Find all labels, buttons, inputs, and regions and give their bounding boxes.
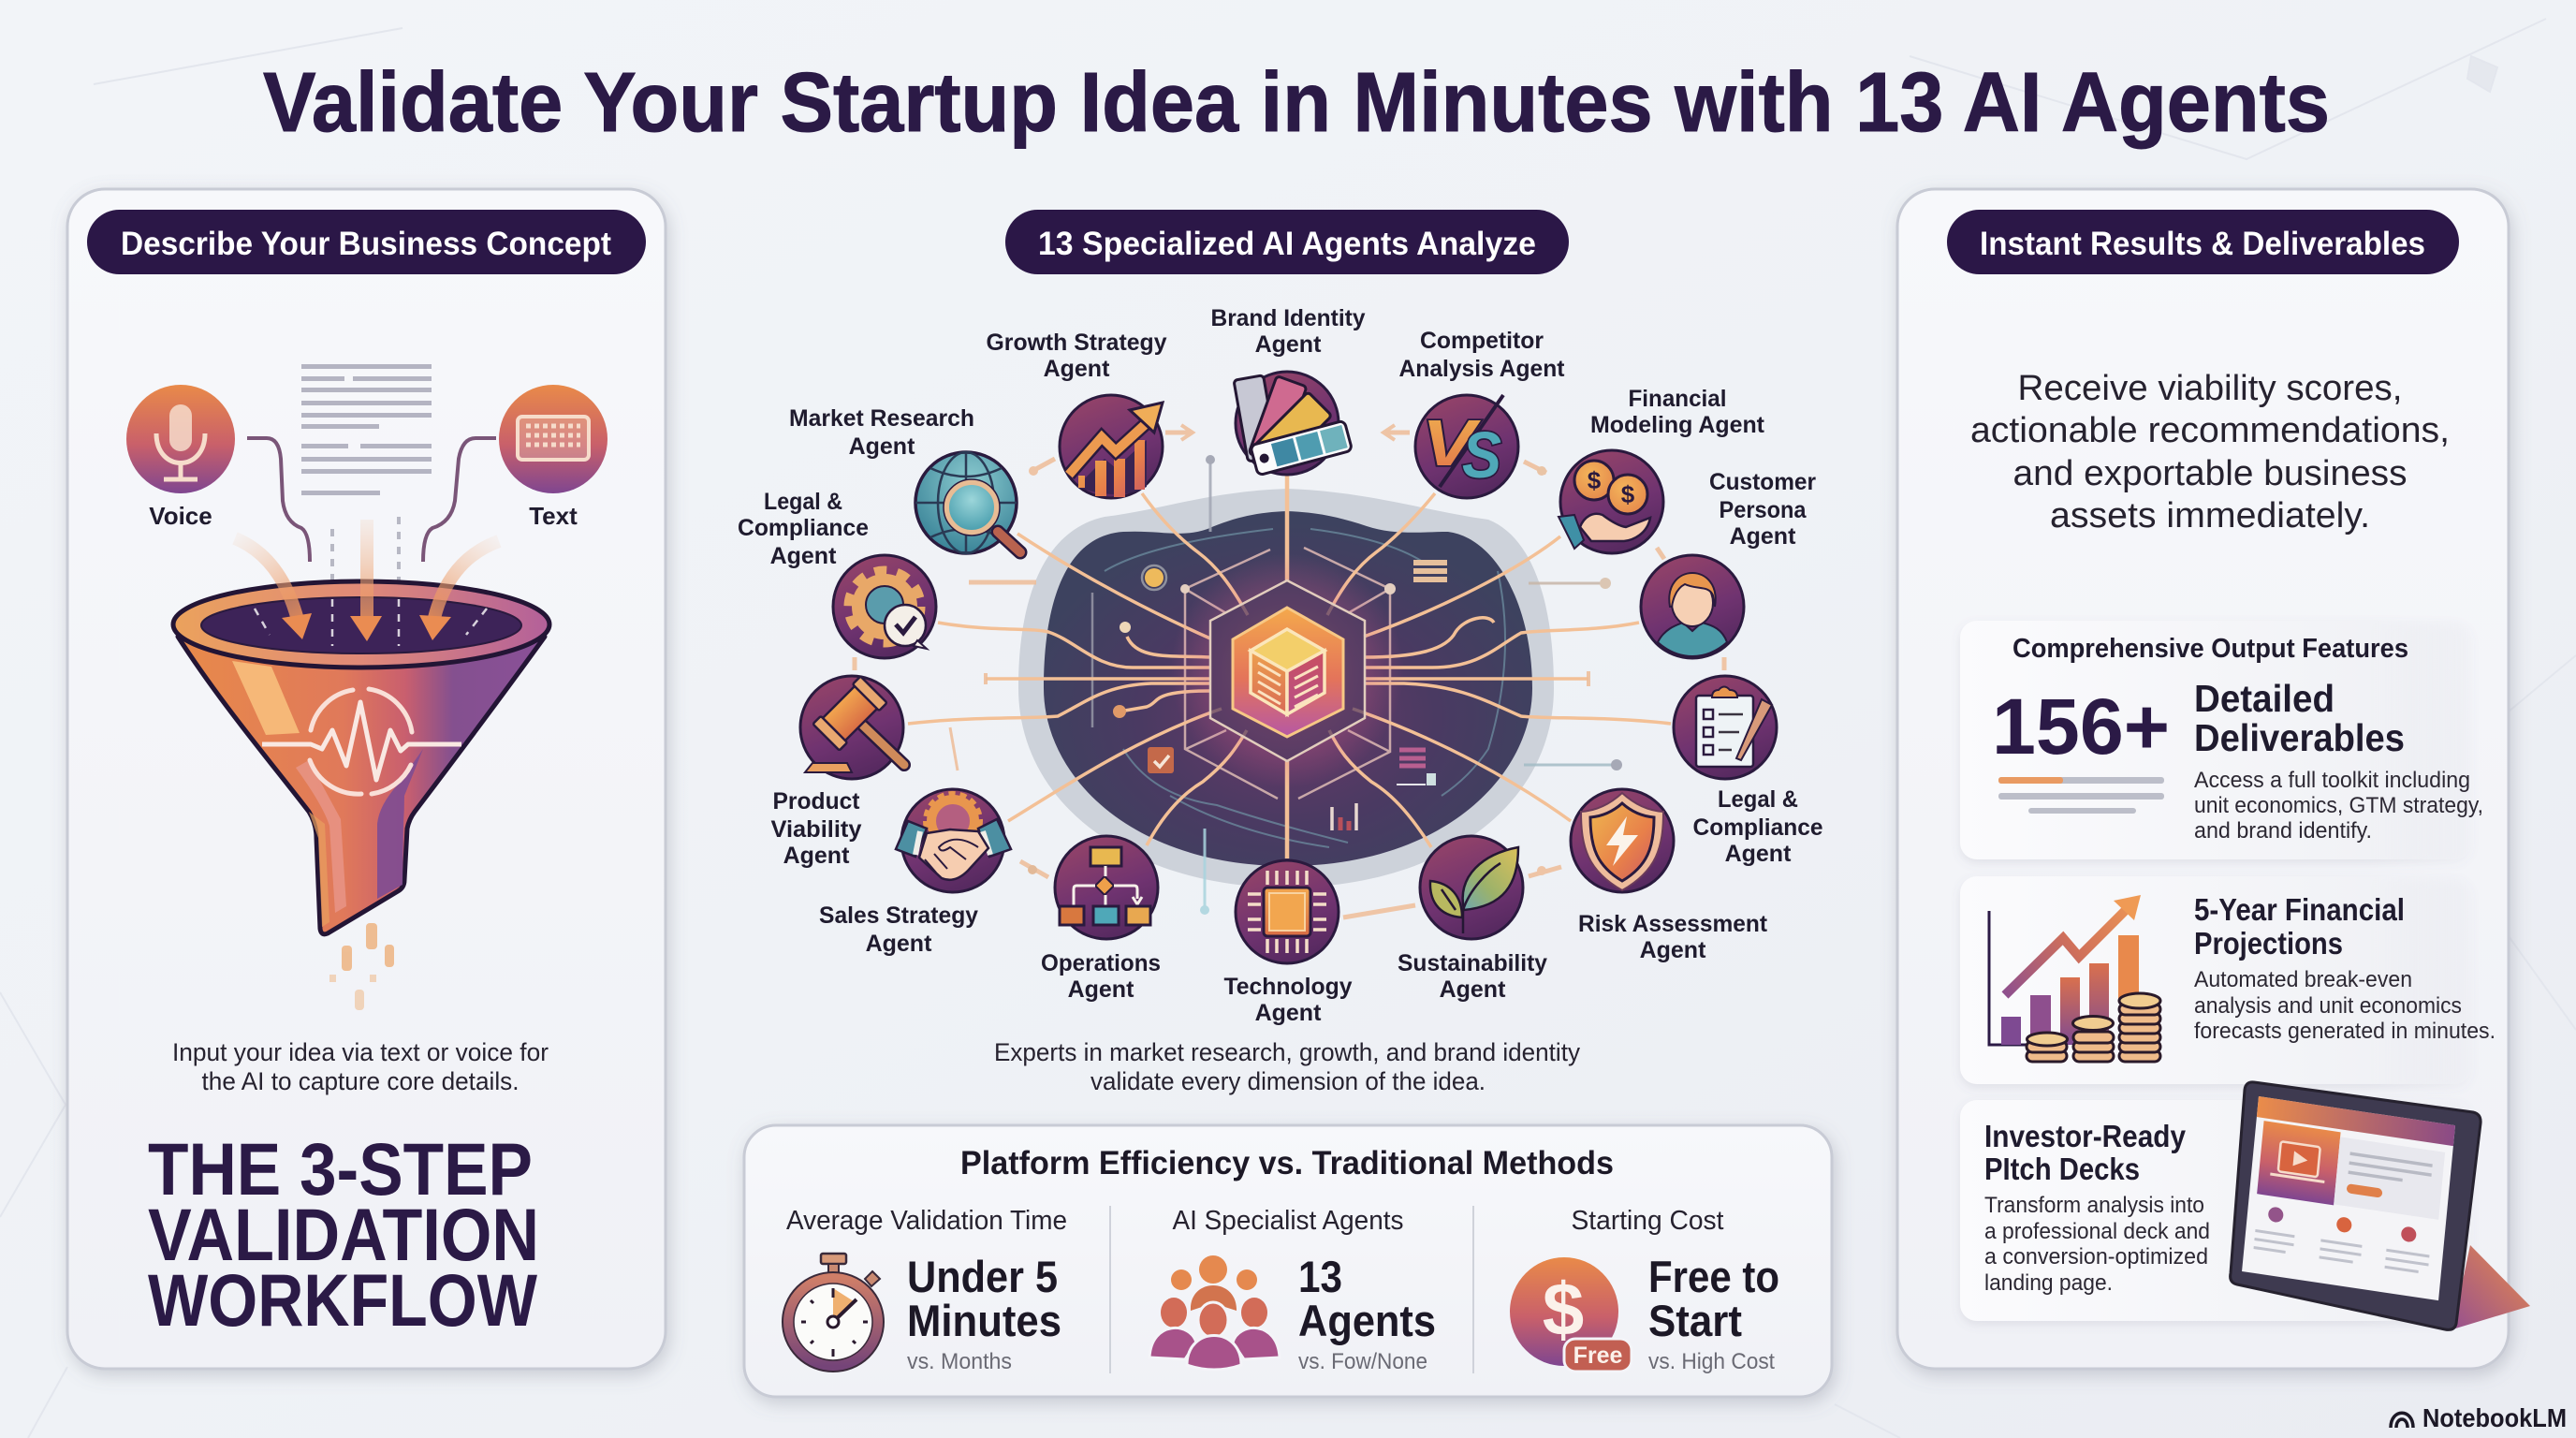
value: free to start: vs. High Cost [1648,1349,1775,1374]
agent: risk assessment [1571,789,1674,892]
icon: dollar coin with free badge: $ [1543,1268,1584,1351]
agent: market research globe [915,452,1020,553]
value: 13 agents: Agents [1298,1296,1436,1345]
label: brand identity: Brand Identity [1211,305,1366,331]
intro text: Receive viability scores, [2018,369,2402,408]
intro text: and exportable business [2012,454,2408,493]
agent: legal checklist [1674,676,1777,779]
intro text: assets immediately. [2050,496,2370,536]
falling idea particles [329,923,394,1010]
value: under 5 minutes: Minutes [907,1296,1061,1345]
label: market research: Agent [849,433,915,460]
value: under 5 minutes: vs. Months [907,1349,1012,1374]
label: technology: Agent [1255,1000,1322,1026]
label: legal and compliance right: Compliance [1692,814,1823,841]
icon: dollar coin with free badge [1510,1257,1632,1372]
label: growth strategy: Growth Strategy [987,330,1167,356]
circuit lines [1105,529,1505,847]
label: legal and compliance right [1692,786,1823,867]
heading pill: 13 specialized agents: 13 Specialized AI Agents Analyze [1038,226,1536,262]
panel: platform efficiency vs traditional methods [744,1125,1832,1397]
text: detailed deliverables: Deliverables [2194,716,2405,759]
label: competitor analysis [1398,328,1565,382]
card: comprehensive output features [1960,621,2483,859]
text: pitch decks: Transform analysis into [1984,1193,2204,1218]
label: operations: Agent [1068,976,1134,1003]
text: financial projections [2194,892,2496,1044]
value: free to start: Start [1648,1296,1742,1345]
description: experts: validate every dimension of the idea. [1090,1067,1486,1095]
label: operations [1041,950,1161,1003]
label: brand identity [1211,305,1366,358]
label: competitor analysis: Analysis Agent [1398,356,1565,382]
label: technology: Technology [1224,974,1353,1000]
text: financial projections: 5-Year Financial [2194,892,2405,927]
metric: starting cost: Starting Cost [1571,1206,1724,1236]
heading: the 3-step validation workflow: VALIDATION [148,1193,539,1276]
text: detailed deliverables: and brand identify. [2194,818,2372,844]
description: experts: Experts in market research, growth, and brand identity [994,1038,1580,1066]
label: risk assessment: Risk Assessment [1578,911,1768,937]
agent: customer persona [1641,555,1744,658]
text: pitch decks: a professional deck and [1984,1219,2210,1244]
stat: 156+: 156+ [1992,682,2170,770]
text: pitch decks: a conversion-optimized [1984,1244,2208,1269]
description: experts [994,1038,1580,1095]
value: 13 agents: 13 [1298,1252,1342,1301]
small flow markers [855,425,1724,917]
label: operations: Operations [1041,950,1161,976]
text: financial projections: Projections [2194,926,2343,961]
label: legal and compliance right: Legal & [1718,786,1798,813]
label: risk assessment: Agent [1640,937,1706,963]
label: product viability: Agent [783,843,850,869]
funnel [173,581,549,934]
agent: product viability gavel [800,676,904,779]
icon: tablet with landing page [2231,1082,2530,1329]
agent: competitor analysis [1415,395,1518,498]
connectors: voice and text to funnel [247,438,496,580]
value: 13 agents: vs. Fow/None [1298,1349,1427,1374]
label: technology [1224,974,1353,1026]
label: financial modeling [1590,386,1765,438]
text: pitch decks [1984,1119,2210,1296]
text: detailed deliverables: Detailed [2194,677,2334,720]
description: input: Input your idea via text or voice for [172,1038,549,1066]
icon: team of people [1149,1255,1280,1370]
label: market research [789,405,974,460]
title: Validate Your Startup Idea in Minutes with 13 AI Agents [263,56,2330,150]
hub decorations [1113,563,1447,830]
description: input: the AI to capture core details. [202,1067,519,1095]
icon: document lines [301,364,432,495]
heading pill: describe: Describe Your Business Concept [121,226,611,262]
text: financial projections: analysis and unit economics [2194,993,2462,1019]
label: sustainability: Agent [1440,976,1506,1003]
panel: instant results and deliverables [1897,189,2530,1369]
label: legal and compliance left [738,489,869,569]
card: financial projections [1960,876,2496,1084]
agent: legal compliance gear [833,555,936,658]
intro text [1970,369,2450,536]
label: legal and compliance left: Compliance [738,515,869,541]
label: financial modeling: Modeling Agent [1590,412,1765,438]
label: risk assessment [1578,911,1768,963]
heading: the 3-step validation workflow: THE 3-STEP [148,1127,533,1211]
heading: the 3-step validation workflow [148,1127,539,1342]
value: free to start: Free to [1648,1252,1779,1301]
label: customer persona: Persona [1719,497,1808,523]
label: product viability [771,788,862,869]
heading pill: 13 specialized agents [1005,210,1569,274]
label: financial modeling: Financial [1629,386,1726,412]
label: voice: Voice [149,502,212,530]
text: financial projections: Automated break-even [2194,967,2412,992]
agent: technology chip [1236,860,1339,963]
label: sales strategy [819,902,978,957]
agent: financial modeling: $ [1588,466,1602,494]
text: financial projections: forecasts generated in minutes. [2194,1019,2496,1044]
label: growth strategy [987,330,1167,382]
icon: stopwatch [783,1254,884,1372]
value: 13 agents [1298,1252,1436,1374]
label: product viability: Viability [771,816,862,843]
text: detailed deliverables: Access a full toolkit including [2194,768,2470,793]
label: customer persona: Agent [1730,523,1796,550]
agent: sales handshake [896,789,1011,892]
text: detailed deliverables [2194,677,2483,844]
heading pill: results: Instant Results & Deliverables [1980,226,2425,262]
agent: financial modeling [1559,450,1663,553]
label: text: Text [529,502,578,530]
icon: dollar coin with free badge: Free [1573,1343,1622,1369]
label: market research: Market Research [789,405,974,432]
label: sales strategy: Agent [866,931,932,957]
metric: ai specialist agents: AI Specialist Agents [1172,1206,1404,1236]
label: legal and compliance left: Legal & [764,489,842,515]
heading pill: results [1947,210,2459,274]
agent network hub [855,425,1724,917]
label: brand identity: Agent [1255,331,1322,358]
central hexagon core [1170,553,1404,787]
card: investor-ready pitch decks [1960,1082,2530,1329]
label: sustainability [1398,950,1547,1003]
label: competitor analysis: Competitor [1420,328,1544,354]
heading pill: describe [87,210,646,274]
label: growth strategy: Agent [1044,356,1110,382]
label: legal and compliance right: Agent [1725,841,1792,867]
icon: voice microphone [126,385,235,493]
panel heading: Platform Efficiency vs. Traditional Methods [960,1145,1614,1181]
description: input [172,1038,549,1095]
agent: operations flowchart [1055,836,1158,939]
agent: financial modeling: $ [1621,480,1635,508]
metric: validation time [783,1206,1067,1374]
value: under 5 minutes [907,1252,1061,1374]
text: pitch decks: PItch Decks [1984,1152,2140,1186]
agent: competitor analysis: S [1462,418,1501,492]
icon: text keyboard [499,385,607,493]
label: product viability: Product [773,788,860,814]
heading: the 3-step validation workflow: WORKFLOW [148,1258,537,1342]
text: pitch decks: Investor-Ready [1984,1119,2187,1153]
label: legal and compliance left: Agent [770,543,837,569]
agent: brand identity [1234,372,1353,476]
label: customer persona [1709,469,1816,550]
agent: sustainability [1420,836,1523,939]
metric: starting cost [1510,1206,1779,1374]
label: sales strategy: Sales Strategy [819,902,978,929]
label: sustainability: Sustainability [1398,950,1547,976]
agent: growth strategy [1060,395,1163,498]
chart: growth bars and coins [1989,895,2160,1062]
metric: validation time: Average Validation Time [786,1206,1067,1236]
card heading: Comprehensive Output Features [2012,634,2408,664]
panel: describe your business concept [67,189,666,1369]
value: free to start [1648,1252,1779,1374]
text: detailed deliverables: unit economics, GTM strategy, [2194,793,2483,818]
text: pitch decks: landing page. [1984,1270,2113,1296]
label: customer persona: Customer [1709,469,1816,495]
value: under 5 minutes: Under 5 [907,1252,1058,1301]
arrows into funnel [235,520,499,641]
stat bars [1998,777,2164,814]
blob background [1018,489,1554,888]
agent: competitor analysis: V [1422,406,1481,479]
metric: ai specialist agents [1149,1206,1436,1374]
radiating connections [908,468,1671,858]
intro text: actionable recommendations, [1970,411,2450,450]
